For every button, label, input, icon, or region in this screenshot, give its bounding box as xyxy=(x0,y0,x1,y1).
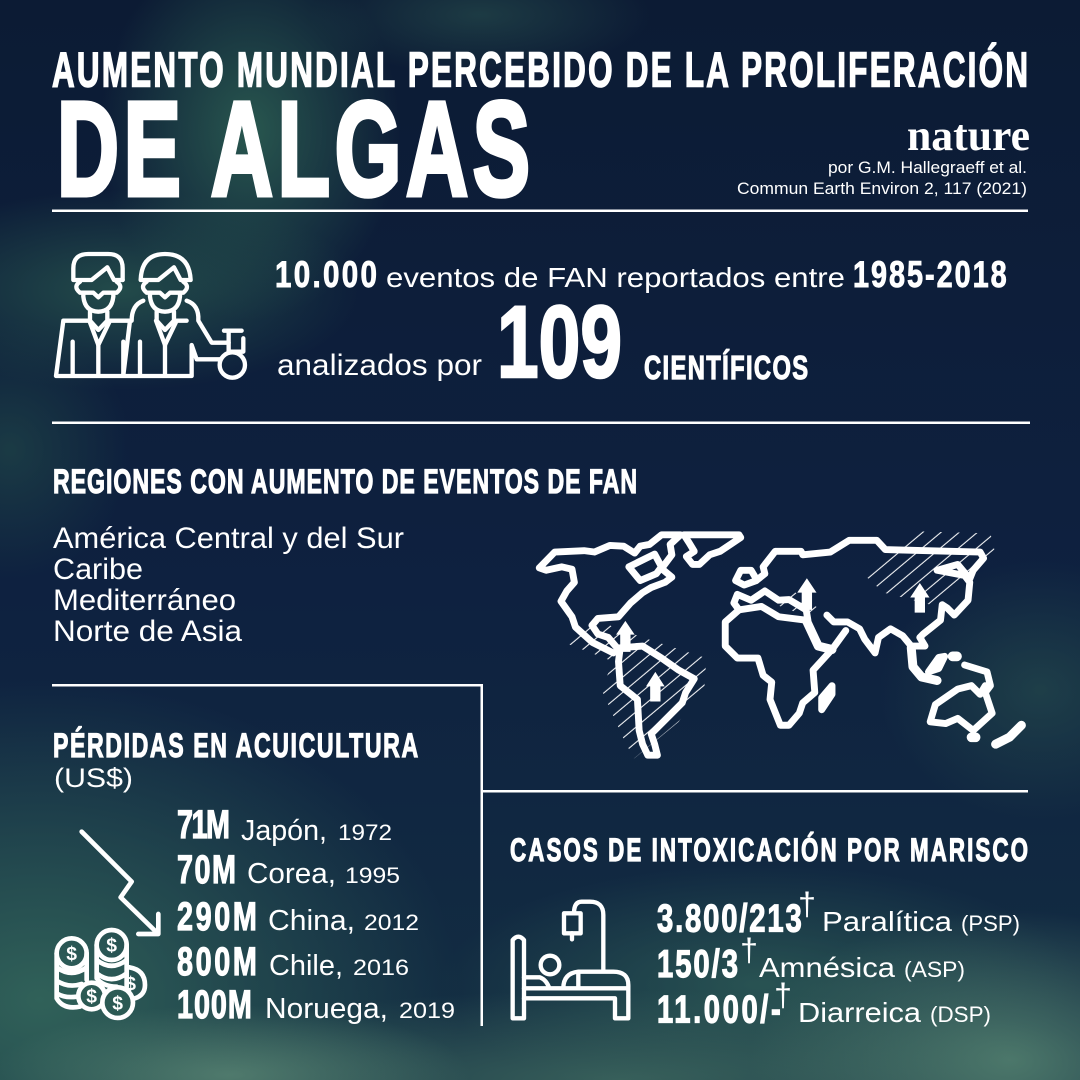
coin dollar signs: $ xyxy=(125,974,136,995)
stat: events reported: 1985-2018 xyxy=(853,255,1007,296)
row: DSP xyxy=(657,977,991,1032)
title: DE ALGAS xyxy=(57,74,530,224)
row: Korea: Corea, xyxy=(247,858,336,890)
row: Norway: Noruega, xyxy=(265,993,388,1025)
title: AUMENTO MUNDIAL PERCEBIDO DE LA PROLIFERACIÓN xyxy=(52,42,1028,97)
stat: scientists: CIENTÍFICOS xyxy=(644,348,808,387)
row: PSP: 3.800/213 xyxy=(657,898,802,941)
row: Norway: 2019 xyxy=(399,998,455,1023)
source credit: por G.M. Hallegraeff et al. xyxy=(828,159,1027,177)
region list xyxy=(53,522,404,648)
divider lines xyxy=(52,210,1030,1026)
coin dollar signs: $ xyxy=(106,936,117,957)
stat: scientists xyxy=(277,285,808,399)
row: China: China, xyxy=(268,905,355,937)
row: PSP: Paralítica xyxy=(822,906,952,937)
row: PSP: † xyxy=(798,886,816,922)
row: PSP xyxy=(657,886,1020,941)
row: Chile: 800M xyxy=(177,939,257,984)
stat: scientists: 109 xyxy=(497,285,622,399)
row: Norway: 100M xyxy=(177,982,252,1027)
row: China: 290M xyxy=(177,894,257,939)
row: Japan: 71M xyxy=(177,802,230,847)
continent outlines xyxy=(539,535,1021,755)
source credit xyxy=(737,111,1030,198)
row: Korea: 1995 xyxy=(345,863,400,888)
row: ASP: † xyxy=(740,932,758,968)
row: Korea: 70M xyxy=(177,847,236,892)
row: Japan: 1972 xyxy=(338,820,392,845)
row: DSP: (DSP) xyxy=(930,1002,991,1027)
stat: events reported: eventos de FAN reportados entre xyxy=(386,262,845,293)
icon: scientists xyxy=(56,254,245,378)
source credit: nature xyxy=(907,111,1030,160)
region list: Caribe xyxy=(53,553,143,586)
arrows: increase markers xyxy=(616,578,929,701)
row: Chile: Chile, xyxy=(269,950,343,982)
row: ASP xyxy=(657,932,965,986)
icon: hospital bed xyxy=(513,902,628,1018)
row: Japan: Japón, xyxy=(241,815,327,847)
coin dollar signs: $ xyxy=(112,993,123,1014)
row: Korea xyxy=(177,847,400,892)
icon: falling arrow and coins xyxy=(57,832,158,1018)
stat: scientists: analizados por xyxy=(277,349,482,382)
heading: aquaculture losses: (US$) xyxy=(54,763,133,793)
row: ASP: (ASP) xyxy=(904,957,965,982)
row: Chile xyxy=(177,939,409,984)
heading: shellfish poisoning: CASOS DE INTOXICACIÓN POR MARISCO xyxy=(510,832,1028,868)
row: Norway xyxy=(177,982,455,1027)
losses list xyxy=(177,802,455,1027)
row: Japan xyxy=(177,802,392,847)
poisoning list xyxy=(657,886,1020,1032)
stat: events reported: 10.000 xyxy=(275,255,377,296)
title xyxy=(52,42,1028,224)
coin dollar signs: $ xyxy=(66,944,77,965)
row: ASP: Amnésica xyxy=(759,952,895,983)
source credit: Commun Earth Environ 2, 117 (2021) xyxy=(737,180,1027,198)
coin dollar signs: $ xyxy=(86,987,97,1008)
row: PSP: (PSP) xyxy=(961,911,1020,936)
heading: aquaculture losses: PÉRDIDAS EN ACUICULTURA xyxy=(53,725,418,765)
coin dollar signs xyxy=(66,936,136,1014)
heading: regions: REGIONES CON AUMENTO DE EVENTOS DE FAN xyxy=(53,464,637,501)
hatched regions xyxy=(560,531,996,759)
heading: aquaculture losses xyxy=(53,725,418,793)
region list: América Central y del Sur xyxy=(53,522,404,555)
row: China: 2012 xyxy=(364,910,419,935)
stat: events reported xyxy=(275,255,1007,296)
row: DSP: Diarreica xyxy=(798,997,921,1028)
row: Chile: 2016 xyxy=(353,955,409,980)
region list: Mediterráneo xyxy=(53,584,236,617)
row: DSP: 11.000/- xyxy=(657,989,781,1032)
region list: Norte de Asia xyxy=(53,615,242,648)
row: ASP: 150/3 xyxy=(657,943,738,986)
world map xyxy=(539,531,1021,759)
row: China xyxy=(177,894,419,939)
row: DSP: † xyxy=(774,977,792,1013)
